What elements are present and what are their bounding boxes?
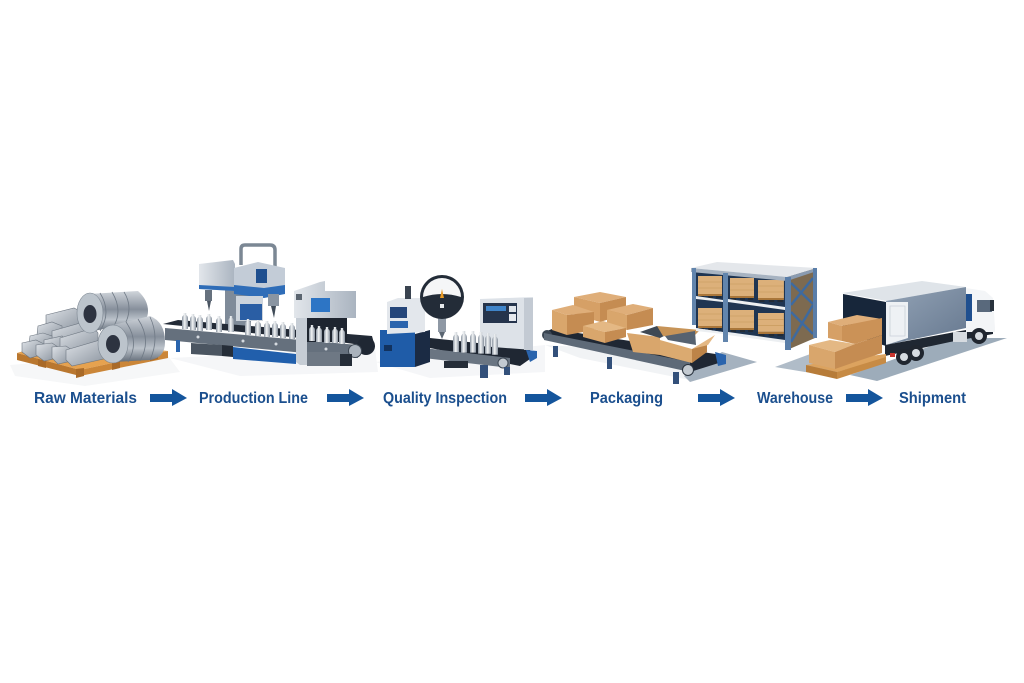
- arrow 2: [327, 389, 364, 406]
- arrow 4: [698, 389, 735, 406]
- arrow 1: [150, 389, 187, 406]
- step 6 illustration: shipment truck: [806, 281, 995, 379]
- cardboard boxes: [552, 292, 715, 363]
- chassis: [885, 328, 993, 356]
- capping machine: [294, 281, 356, 366]
- lower steel coil: [98, 316, 165, 363]
- label: Raw Materials: Raw Materials: [34, 390, 137, 407]
- step 5 illustration: warehouse racking: [691, 262, 817, 350]
- step 3 illustration: quality inspection: [380, 275, 537, 378]
- arrow 3: [525, 389, 562, 406]
- rack frame: [691, 262, 817, 350]
- control cabinet: [480, 297, 533, 350]
- rack crates: [698, 276, 784, 336]
- truck pallet: [806, 354, 886, 379]
- belt and rail: [415, 338, 537, 378]
- bottles on belt: [182, 313, 295, 339]
- cab: [953, 288, 995, 342]
- arch handle: [241, 245, 275, 268]
- upper steel coil: [77, 291, 148, 333]
- trailer: [842, 281, 966, 346]
- arrow 5: [846, 389, 883, 406]
- step 4 illustration: packaging: [542, 292, 726, 384]
- packaging conveyor: [542, 329, 726, 384]
- base units: [191, 343, 296, 364]
- label: Shipment: Shipment: [899, 390, 967, 407]
- truck boxes: [809, 315, 882, 369]
- floor shadows: [10, 338, 1007, 386]
- conveyor belt: [163, 320, 375, 358]
- machine column: [225, 290, 251, 328]
- inspected bottles: [453, 331, 498, 355]
- rack back and side bracing: [696, 268, 815, 350]
- wooden pallet: [17, 340, 168, 378]
- step 2 illustration: production line: [163, 245, 375, 366]
- label: Quality Inspection: Quality Inspection: [383, 390, 507, 407]
- label: Warehouse: Warehouse: [757, 390, 833, 407]
- left machine head: [199, 260, 235, 311]
- right machine head: [234, 262, 285, 321]
- ingot stack: [22, 308, 108, 366]
- label: Production Line: Production Line: [199, 390, 308, 407]
- inspection machine: [380, 286, 430, 367]
- wheels: [890, 328, 987, 365]
- label: Packaging: Packaging: [590, 390, 663, 407]
- pressure gauge: [420, 275, 464, 339]
- step 1 illustration: raw materials: [17, 291, 168, 378]
